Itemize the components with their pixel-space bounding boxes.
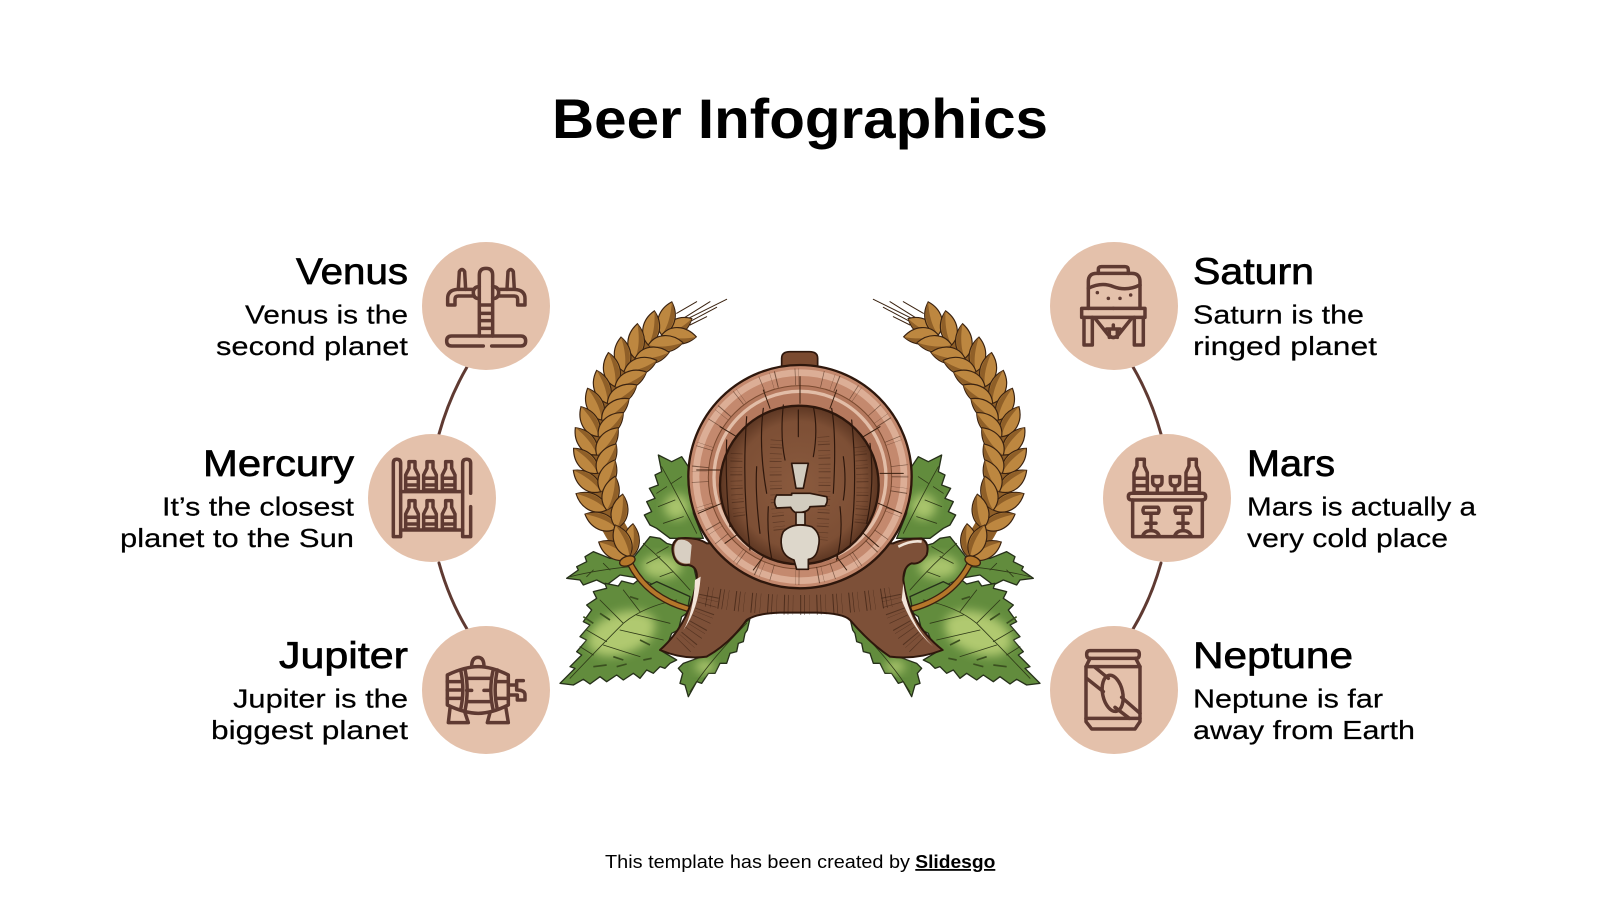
footer credit: This template has been created by [605, 852, 910, 872]
item: Venus [216, 242, 550, 370]
barrel stand [660, 538, 943, 657]
item: Mars: Mars is actually a [1247, 492, 1477, 522]
item: Mercury: planet to the Sun [120, 523, 354, 553]
item: Jupiter [211, 626, 550, 754]
right side: mirrored leaves and wheat [850, 299, 1040, 697]
item: Mars: very cold place [1247, 523, 1448, 553]
connector: Saturn to Mars [1133, 367, 1161, 434]
connector: Mars to Neptune [1133, 563, 1161, 629]
infographic canvas [122, 98, 1476, 872]
item: Neptune [1050, 626, 1415, 754]
wheat knot [618, 554, 636, 568]
title: Beer Infographics [552, 87, 1048, 150]
barrel [688, 352, 912, 588]
barrel bung [782, 352, 818, 367]
wheat spike [568, 299, 697, 566]
item: Saturn [1050, 242, 1378, 370]
item: Jupiter: Jupiter is the [233, 684, 408, 714]
item: Mercury [120, 434, 496, 562]
item: Saturn: Saturn [1193, 251, 1314, 292]
item: Neptune: away from Earth [1193, 715, 1415, 745]
item: Saturn: Saturn is the [1193, 300, 1364, 330]
item: Venus: Venus is the [245, 300, 408, 330]
item: Neptune: Neptune is far [1193, 684, 1383, 714]
connector: Venus to Mercury [439, 367, 467, 434]
item: Neptune: Neptune [1193, 635, 1353, 676]
item: Jupiter: biggest planet [211, 715, 409, 745]
left side: leaves and wheat [560, 299, 750, 697]
barrel tap [775, 463, 827, 569]
item: Venus: Venus [296, 251, 408, 292]
connector: Mercury to Jupiter [439, 563, 467, 629]
item: Venus: second planet [216, 331, 409, 361]
item: Jupiter: Jupiter [279, 635, 408, 676]
barrel head [720, 406, 879, 564]
hop leaf middle [567, 537, 697, 608]
hop leaf upper [644, 455, 703, 538]
item: Mars: Mars [1247, 443, 1335, 484]
hop leaf lower [678, 618, 750, 697]
illustration: beer barrel with wheat and hop leaves [560, 299, 1040, 697]
wheat stem [630, 563, 687, 608]
footer credit: Slidesgo [915, 852, 995, 872]
item: Saturn: ringed planet [1193, 331, 1378, 361]
hop leaf large [560, 580, 690, 685]
item: Mercury: It’s the closest [162, 492, 355, 522]
item: Mars [1103, 434, 1477, 562]
barrel outer ring [688, 365, 912, 588]
item: Mercury: Mercury [203, 443, 355, 484]
wheat awns [677, 299, 727, 325]
